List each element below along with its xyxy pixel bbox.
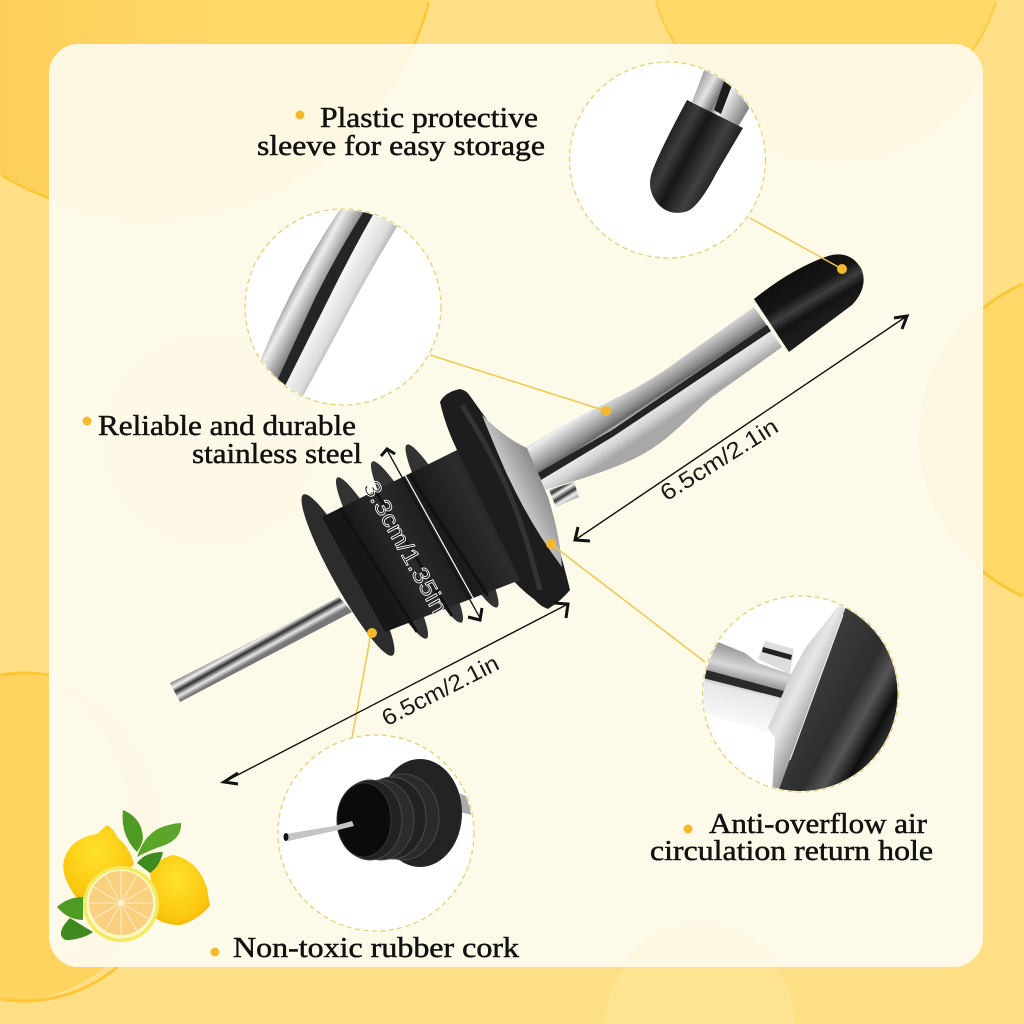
- rib lines: [340, 475, 488, 632]
- label: sleeve: Plastic protective: [320, 102, 538, 134]
- rib 4: [396, 438, 508, 614]
- flange: [440, 389, 570, 609]
- callout circle: stainless steel: [245, 205, 441, 405]
- label: air hole: [650, 808, 933, 867]
- silver face: [482, 415, 562, 567]
- callout circle: protective sleeve: [570, 60, 766, 258]
- dimension: lower length: [224, 603, 568, 784]
- connector lines: [352, 218, 842, 738]
- callout circle: rubber cork: [278, 735, 474, 931]
- label: air hole: circulation return hole: [650, 835, 933, 867]
- rib 2: [326, 471, 438, 645]
- label: steel: stainless steel: [192, 438, 362, 470]
- spout stripe: [538, 325, 771, 480]
- dimension: upper length: [575, 316, 907, 541]
- callout circle: air return hole: [700, 596, 905, 795]
- label: air hole: Anti-overflow air: [709, 808, 927, 840]
- label: sleeve: [257, 102, 545, 162]
- label: steel: Reliable and durable: [98, 410, 356, 442]
- sleeve cap: [754, 254, 864, 352]
- thin rod: [170, 597, 352, 702]
- connector dots: [367, 264, 847, 638]
- dimension: body height: [358, 449, 483, 620]
- rib 3: [361, 455, 473, 629]
- rib 1: [290, 487, 406, 663]
- label: steel: [82, 410, 362, 470]
- dimension: upper length: 6.5cm/2.1in: [655, 413, 783, 506]
- spout tube: [525, 307, 782, 490]
- pourer product: [170, 254, 864, 702]
- flange highlight: [462, 405, 540, 590]
- dimension: body height: 3.3cm/1.35in: [358, 476, 453, 618]
- icon: lemons: [57, 810, 210, 942]
- dimension: lower length: 6.5cm/2.1in: [377, 650, 503, 731]
- label: sleeve: sleeve for easy storage: [257, 130, 545, 162]
- rubber core: [322, 450, 520, 632]
- label: cork: Non-toxic rubber cork: [233, 932, 520, 964]
- air hole pin: [549, 482, 579, 507]
